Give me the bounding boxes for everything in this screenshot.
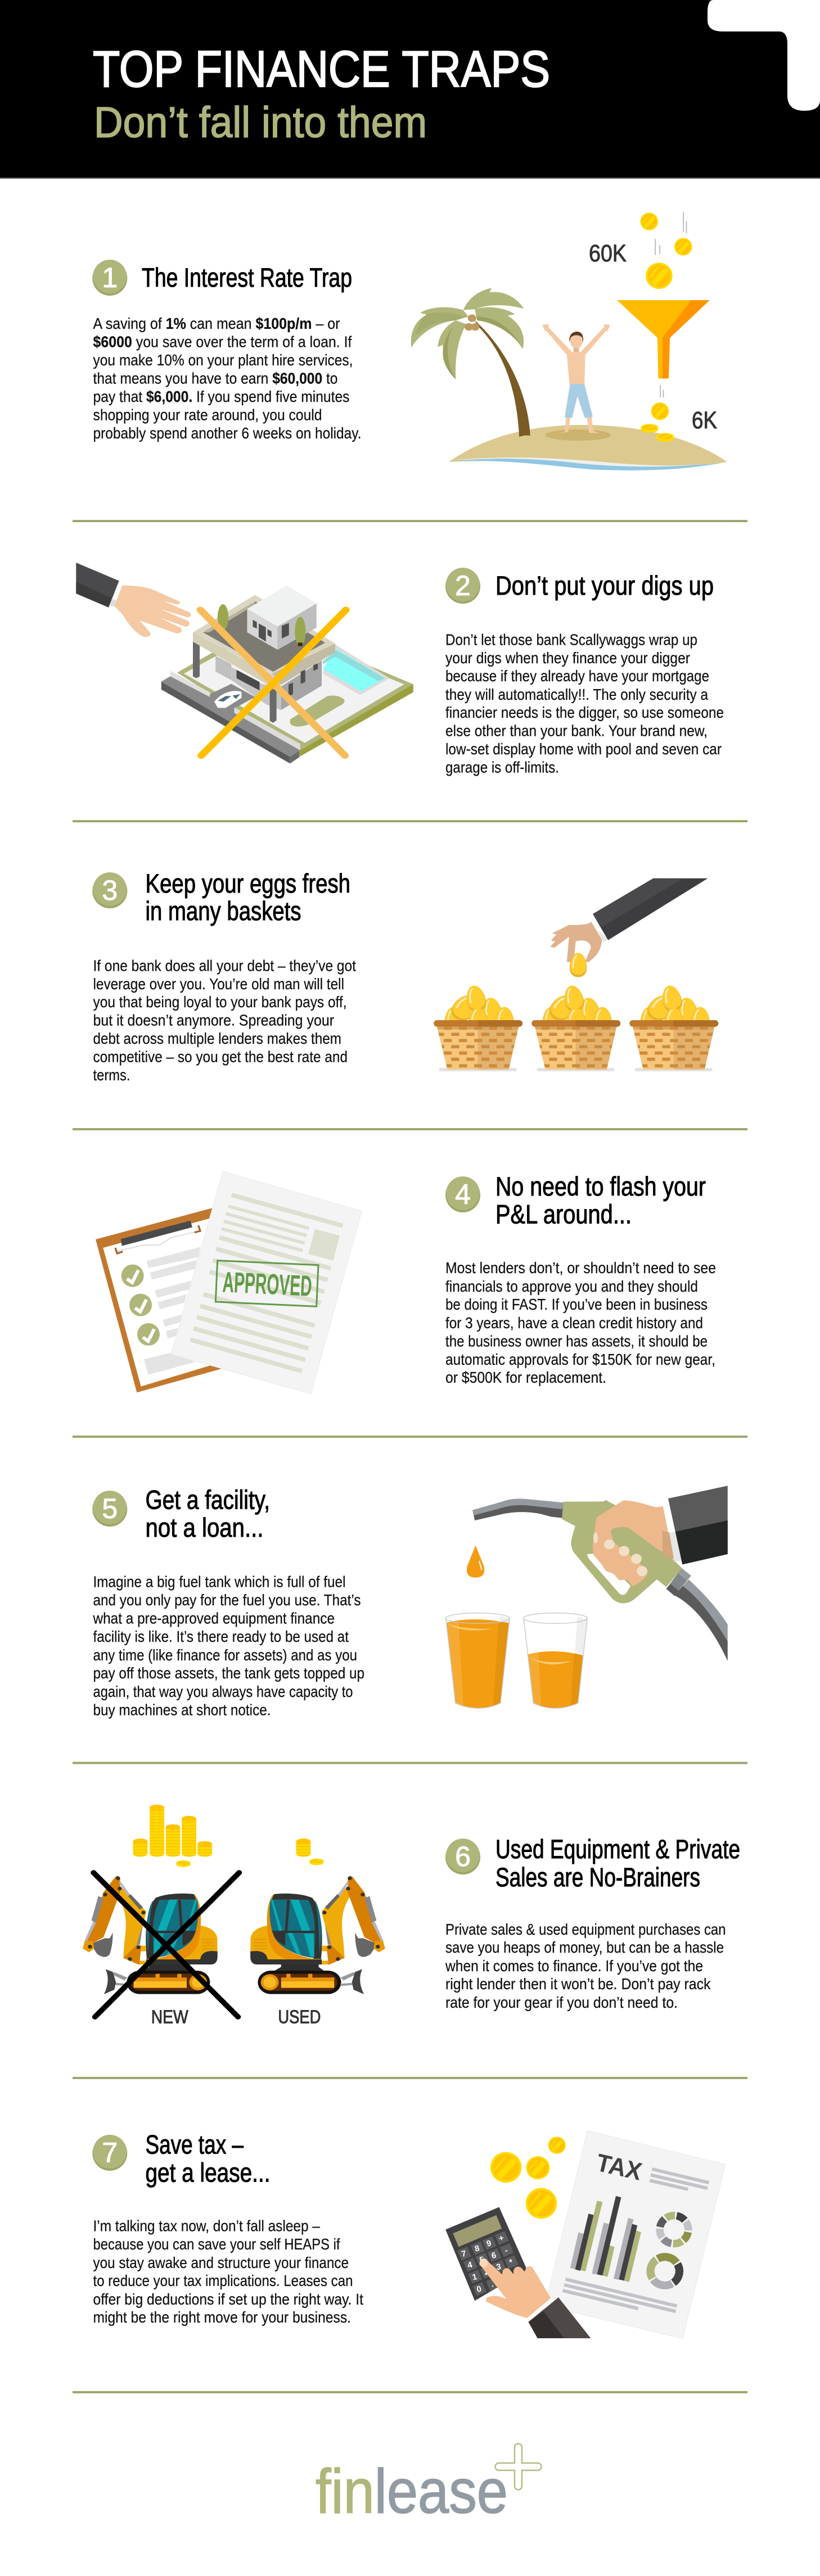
- illustration: new vs used diggers: [83, 1805, 385, 2017]
- calculator: 7: [461, 2249, 467, 2259]
- number badge 7: 7: [102, 2137, 118, 2168]
- calculator: 8: [474, 2244, 480, 2254]
- number badge 5: 5: [102, 1493, 118, 1524]
- number badge 3: [92, 872, 127, 908]
- logo: finlease: finlease: [316, 2456, 508, 2526]
- body text 6: save you heaps of money, but can be a hassle: [445, 1939, 724, 1956]
- heading 2: Don’t put your digs up: [495, 571, 714, 600]
- panel: used equipment: [83, 1805, 740, 2027]
- tax document: [545, 2131, 726, 2339]
- body text 5: again, that way you always have capacity to: [93, 1683, 353, 1700]
- body text 3: [93, 957, 356, 1084]
- number badge 1: [92, 260, 127, 296]
- label NEW: NEW: [151, 2007, 188, 2027]
- panel: don't put your digs up: [76, 563, 724, 776]
- body text 1: probably spend another 6 weeks on holiday.: [93, 424, 361, 442]
- calculator: 1: [471, 2272, 478, 2282]
- body text 3: competitive – so you get the best rate and: [93, 1048, 348, 1066]
- illustration: island, funnel and coins: [411, 212, 727, 470]
- body text 5: any time (like finance for assets) and as you: [93, 1646, 357, 1664]
- illustration: fuel nozzle and glasses: [446, 1486, 728, 1708]
- label USED: USED: [278, 2007, 321, 2027]
- held egg: [570, 953, 587, 977]
- hose: [666, 1568, 728, 1661]
- body text 1: pay that $6,000. If you spend five minutes: [93, 388, 350, 405]
- approved document: [171, 1171, 362, 1394]
- header band: [0, 0, 820, 179]
- panel: save tax: [92, 2129, 726, 2339]
- heading 5: Get a facility,: [145, 1485, 270, 1514]
- body text 4: the business owner has assets, it should be: [445, 1332, 708, 1350]
- heading 7: [145, 2129, 270, 2188]
- fuel drop: [467, 1545, 484, 1578]
- panel: eggs in many baskets: [92, 868, 718, 1084]
- basket 1: [434, 984, 522, 1071]
- half glass: [524, 1613, 587, 1708]
- panel: no need to flash P&L: [96, 1171, 716, 1394]
- heading 5: not a loan...: [145, 1513, 263, 1542]
- body text 2: your digs when they finance your digger: [445, 649, 690, 667]
- heading 6: Sales are No-Brainers: [495, 1862, 700, 1892]
- donut chart bottom: [645, 2252, 684, 2290]
- body text 7: might be the right move for your business.: [93, 2308, 351, 2326]
- body text 5: pay off those assets, the tank gets topped up: [93, 1664, 364, 1682]
- body text 3: terms.: [93, 1066, 130, 1084]
- body text 4: automatic approvals for $150K for new gear,: [445, 1351, 715, 1368]
- number badge 5: [92, 1491, 127, 1527]
- corner notch: [708, 0, 820, 111]
- new digger: [83, 1876, 218, 1994]
- sleeve: [668, 1486, 728, 1564]
- body text 3: you that being loyal to your bank pays off,: [93, 993, 346, 1011]
- number badge 6: 6: [455, 1841, 471, 1872]
- heading 3: Keep your eggs fresh: [145, 868, 350, 898]
- body text 6: [445, 1921, 726, 2011]
- man: [542, 324, 610, 434]
- body text 6: when it comes to finance. If you’ve got the: [445, 1957, 703, 1975]
- heading 7: Save tax –: [145, 2129, 244, 2160]
- body text 7: I’m talking tax now, don’t fall asleep –: [93, 2217, 320, 2235]
- panel: interest rate trap: [92, 212, 727, 470]
- body text 4: financials to approve you and they should: [445, 1278, 698, 1295]
- body text 4: for 3 years, have a clean credit history and: [445, 1314, 703, 1332]
- body text 5: facility is like. It’s there ready to be used at: [93, 1628, 349, 1645]
- heading 4: [495, 1171, 706, 1229]
- subtitle: Don’t fall into them: [94, 98, 427, 147]
- illustration: tax document, coins and calculator: [445, 2131, 726, 2339]
- body text 4: be doing it FAST. If you’ve been in business: [445, 1296, 708, 1313]
- basket 2: [531, 984, 620, 1071]
- body text 7: [93, 2217, 363, 2326]
- body text 2: they will automatically!!. The only security a: [445, 686, 708, 703]
- falling coins: [640, 212, 692, 442]
- panel: get a facility: [92, 1485, 728, 1719]
- heading 1: The Interest Rate Trap: [142, 262, 352, 292]
- heading 4: No need to flash your: [495, 1171, 706, 1201]
- body text 5: Imagine a big fuel tank which is full of fuel: [93, 1573, 345, 1591]
- body text 4: [445, 1259, 716, 1386]
- body text 7: offer big deductions if set up the right way. It: [93, 2290, 363, 2308]
- calculator: +: [498, 2234, 505, 2243]
- calculator: -: [504, 2246, 508, 2256]
- basket 3: [629, 984, 718, 1071]
- calculator: 4: [467, 2261, 474, 2270]
- hand and sleeve: [480, 2258, 591, 2338]
- body text 5: what a pre-approved equipment finance: [93, 1610, 335, 1627]
- heading 3: in many baskets: [145, 896, 301, 926]
- body text 3: debt across multiple lenders makes them: [93, 1030, 341, 1047]
- heading 6: [495, 1834, 740, 1892]
- funnel: [617, 300, 710, 378]
- number badge 3: 3: [102, 875, 118, 906]
- body text 1: $6000 you save over the term of a loan. If: [93, 333, 352, 351]
- illustration: hand placing egg in baskets: [434, 879, 718, 1071]
- calculator: 0: [476, 2285, 483, 2294]
- body text 7: because you can save your self HEAPS if: [93, 2235, 340, 2253]
- calculator: 3: [495, 2262, 502, 2272]
- calculator: 5: [479, 2255, 485, 2265]
- donut chart top: [654, 2210, 694, 2249]
- body text 2: Don’t let those bank Scallywaggs wrap up: [445, 631, 697, 649]
- coin stacks: new: [133, 1805, 212, 1867]
- used digger: [250, 1876, 385, 1994]
- calculator: 9: [486, 2239, 492, 2249]
- body text 2: garage is off-limits.: [445, 759, 559, 776]
- number badge 2: 2: [455, 570, 471, 601]
- palm tree: [411, 288, 530, 437]
- body text 1: that means you have to earn $60,000 to: [93, 370, 337, 387]
- approved document: APPROVED: [222, 1265, 313, 1302]
- number badge 2: [445, 568, 480, 604]
- body text 3: If one bank does all your debt – they’ve got: [93, 957, 356, 975]
- body text 2: [445, 631, 724, 776]
- calculator: *: [508, 2258, 513, 2267]
- label 60K: 60K: [589, 240, 627, 267]
- black cross over new digger: [93, 1873, 239, 2017]
- arm and hand: [550, 879, 708, 962]
- bar chart: [570, 2196, 641, 2282]
- body text 6: rate for your gear if you don’t need to.: [445, 1994, 678, 2011]
- body text 1: A saving of 1% can mean $100p/m – or: [93, 315, 340, 332]
- number badge 6: [445, 1839, 480, 1875]
- number badge 4: [445, 1176, 480, 1212]
- body text 5: and you only pay for the fuel you use. That’s: [93, 1591, 361, 1609]
- crossed-out mark: [200, 610, 346, 755]
- tax document: TAX: [594, 2149, 645, 2186]
- number badge 4: 4: [455, 1179, 471, 1210]
- illustration: clipboard and approved document: [96, 1171, 362, 1394]
- house on plot: [161, 586, 413, 763]
- body text 4: or $500K for replacement.: [445, 1369, 606, 1386]
- body text 3: but it doesn’t anymore. Spreading your: [93, 1012, 334, 1029]
- body text 1: you make 10% on your plant hire services,: [93, 351, 353, 369]
- body text 7: to reduce your tax implications. Leases can: [93, 2272, 353, 2289]
- calculator: 2: [484, 2267, 490, 2277]
- heading 6: Used Equipment & Private: [495, 1834, 740, 1864]
- body text 6: right lender then it won’t be. Don’t pay rack: [445, 1975, 711, 1993]
- body text 1: [93, 315, 361, 442]
- label 6K: 6K: [692, 407, 717, 434]
- title: TOP FINANCE TRAPS: [93, 41, 550, 98]
- hand: [593, 1500, 674, 1586]
- body text 2: financier needs is the digger, so use someone: [445, 704, 724, 721]
- body text 2: low-set display home with pool and seven car: [445, 740, 722, 758]
- calculator: 6: [490, 2251, 497, 2261]
- full glass: [446, 1613, 510, 1708]
- body text 3: leverage over you. You’re old man will tell: [93, 975, 344, 993]
- nozzle spout: [472, 1498, 563, 1520]
- illustration: hand reaching for house: [76, 563, 413, 763]
- coin stack: used: [296, 1839, 324, 1865]
- body text 2: else other than your bank. Your brand new,: [445, 722, 708, 740]
- coins: [490, 2136, 566, 2219]
- clipboard: [96, 1208, 259, 1392]
- body text 2: because if they already have your mortgage: [445, 667, 709, 685]
- body text 6: Private sales & used equipment purchases can: [445, 1921, 726, 1938]
- body text 5: buy machines at short notice.: [93, 1701, 271, 1719]
- island: [449, 425, 727, 470]
- logo plus mark: [495, 2444, 542, 2490]
- body text 7: you stay awake and structure your finance: [93, 2254, 349, 2271]
- heading 5: [145, 1485, 270, 1542]
- heading 3: [145, 868, 350, 926]
- body text 1: shopping your rate around, you could: [93, 406, 322, 424]
- nozzle handle: [562, 1500, 682, 1603]
- number badge 1: 1: [102, 262, 118, 293]
- sleeve and hand: [76, 563, 191, 637]
- heading 4: P&L around...: [495, 1199, 632, 1229]
- number badge 7: [92, 2135, 127, 2171]
- body text 4: Most lenders don’t, or shouldn’t need to see: [445, 1259, 716, 1276]
- heading 7: get a lease...: [145, 2157, 270, 2188]
- calculator: [445, 2207, 527, 2301]
- body text 5: [93, 1573, 364, 1719]
- calculator: .: [490, 2280, 494, 2289]
